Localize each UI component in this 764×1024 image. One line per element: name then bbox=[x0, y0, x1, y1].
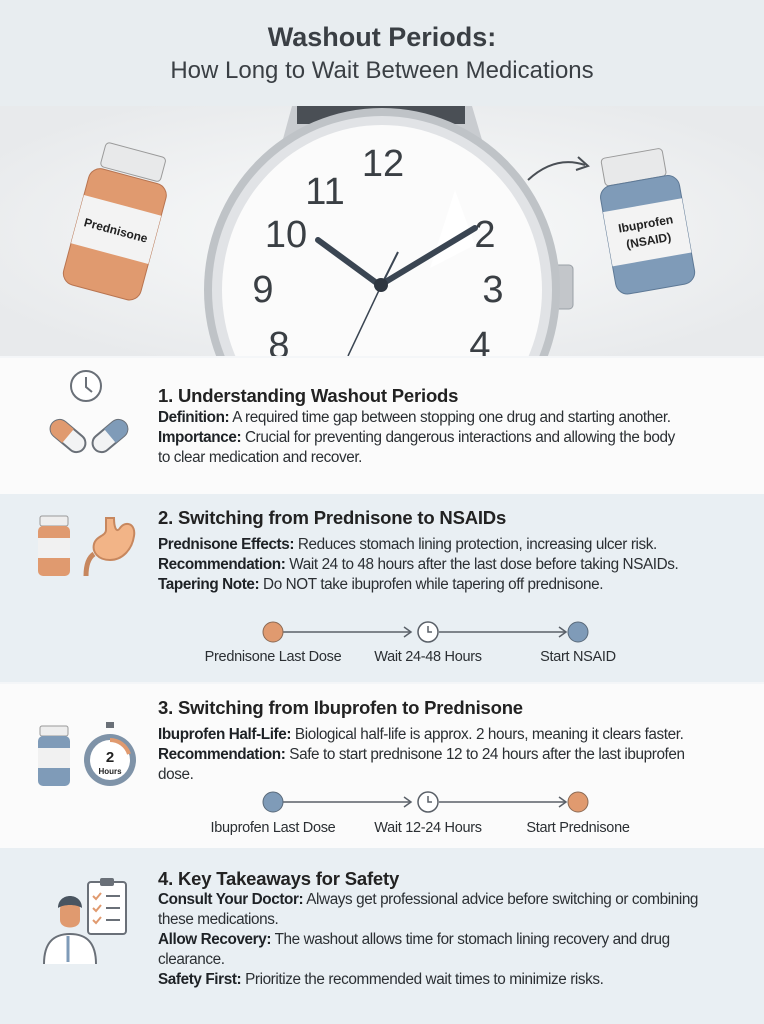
title band bbox=[0, 0, 764, 106]
crown bbox=[553, 265, 573, 309]
heading 4: 4. Key Takeaways for Safety bbox=[158, 868, 399, 889]
heading 2: 2. Switching from Prednisone to NSAIDs bbox=[158, 507, 506, 528]
text block 4: clearance. bbox=[158, 951, 225, 968]
icon: bottle and stopwatch bbox=[38, 722, 136, 786]
panel: section 3 bbox=[0, 684, 764, 848]
text block 4: Safety First: Prioritize the recommended wait times to minimize risks. bbox=[158, 971, 604, 988]
heading 1: 1. Understanding Washout Periods bbox=[158, 385, 458, 406]
timeline: prednisone to NSAID: Start NSAID bbox=[540, 649, 616, 665]
watch case and face bbox=[204, 108, 560, 472]
watch case and face: 2 bbox=[474, 214, 496, 256]
bottle: Prednisone bbox=[61, 140, 176, 303]
text block 3: Ibuprofen Half-Life: Biological half-life is approx. 2 hours, meaning it clears faster. bbox=[158, 726, 683, 743]
timeline: ibuprofen to prednisone: Wait 12-24 Hours bbox=[374, 820, 482, 836]
panel: section 2 bbox=[0, 494, 764, 682]
heading 3: 3. Switching from Ibuprofen to Prednisone bbox=[158, 697, 523, 718]
watch strap bbox=[280, 106, 485, 150]
text block 3: Recommendation: Safe to start prednisone 12 to 24 hours after the last ibuprofen bbox=[158, 746, 685, 763]
text block 4: Allow Recovery: The washout allows time for stomach lining recovery and drug bbox=[158, 931, 670, 948]
icon: clock and capsules bbox=[50, 370, 128, 454]
text block 1: Importance: Crucial for preventing dangerous interactions and allowing the body bbox=[158, 429, 675, 446]
icon: doctor with clipboard bbox=[43, 878, 127, 964]
text block 1 bbox=[158, 409, 676, 466]
panel: section 1 bbox=[0, 358, 764, 494]
text block 3 bbox=[158, 726, 685, 783]
bottle: Ibuprofen: (NSAID) bbox=[625, 230, 672, 252]
text block 3: dose. bbox=[158, 766, 193, 783]
bottle: Ibuprofen bbox=[594, 146, 697, 296]
text block 2: Prednisone Effects: Reduces stomach lining protection, increasing ulcer risk. bbox=[158, 536, 657, 553]
text block 4: Consult Your Doctor: Always get professional advice before switching or combining bbox=[158, 891, 698, 908]
watch case and face: 11 bbox=[305, 171, 345, 213]
timeline: ibuprofen to prednisone: Start Prednisone bbox=[526, 820, 630, 836]
text block 2: Tapering Note: Do NOT take ibuprofen while tapering off prednisone. bbox=[158, 576, 603, 593]
watch case and face: 10 bbox=[265, 214, 307, 256]
timeline: prednisone to NSAID: Wait 24-48 Hours bbox=[374, 649, 482, 665]
bottle: Ibuprofen: Ibuprofen bbox=[617, 212, 674, 236]
icon: bottle and stomach bbox=[38, 516, 136, 576]
text block 1: to clear medication and recover. bbox=[158, 449, 362, 466]
title: Washout Periods: bbox=[268, 22, 496, 52]
hero illustration: watch and bottles bbox=[0, 106, 764, 356]
bottle: Prednisone: Prednisone bbox=[82, 215, 150, 246]
text block 4 bbox=[158, 891, 698, 988]
text block 2 bbox=[158, 536, 678, 593]
icon: bottle and stopwatch: 2 bbox=[106, 749, 114, 766]
watch case and face: 3 bbox=[482, 269, 504, 311]
timeline: ibuprofen to prednisone: Ibuprofen Last Dose bbox=[211, 820, 335, 836]
arrow bbox=[528, 157, 588, 180]
title: How Long to Wait Between Medications bbox=[170, 57, 594, 84]
timeline: ibuprofen to prednisone bbox=[211, 791, 630, 836]
text block 4: these medications. bbox=[158, 911, 278, 928]
watch case and face: 12 bbox=[362, 143, 404, 185]
panel: section 4 bbox=[0, 848, 764, 1024]
watch case and face: 9 bbox=[252, 269, 274, 311]
text block 2: Recommendation: Wait 24 to 48 hours after the last dose before taking NSAIDs. bbox=[158, 556, 678, 573]
title bbox=[170, 22, 594, 84]
icon: bottle and stopwatch: Hours bbox=[98, 767, 122, 776]
timeline: prednisone to NSAID: Prednisone Last Dose bbox=[205, 649, 341, 665]
text block 1: Definition: A required time gap between stopping one drug and starting another. bbox=[158, 409, 671, 426]
timeline: prednisone to NSAID bbox=[205, 621, 616, 665]
